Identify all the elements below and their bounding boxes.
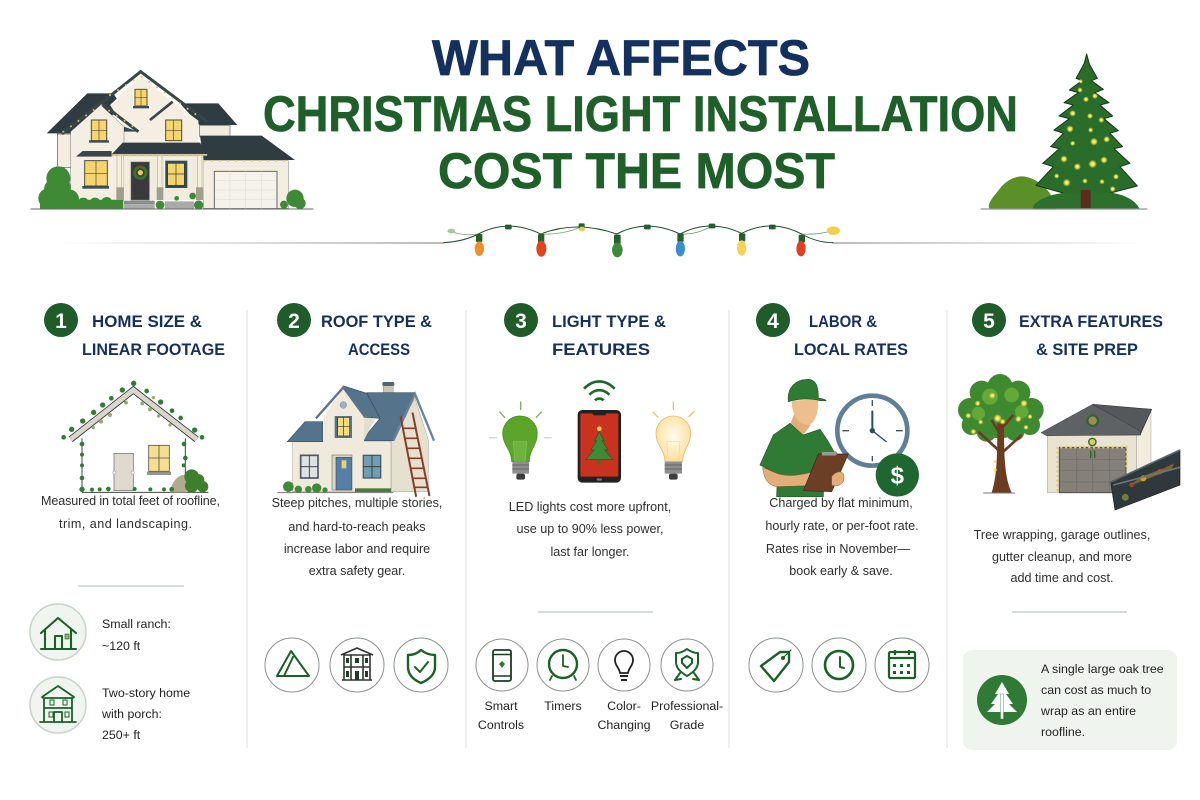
number badge 4 [756, 303, 790, 337]
example: two-story home: Two-story home [102, 686, 190, 700]
heading: ACCESS [348, 340, 410, 359]
heading [321, 312, 432, 359]
heading [1019, 312, 1163, 359]
body text: Tree wrapping, garage outlines, [974, 528, 1150, 542]
title: WHAT AFFECTS [432, 30, 810, 86]
body text: last far longer. [550, 545, 630, 559]
heading: EXTRA FEATURES [1019, 312, 1163, 331]
number badge 5 [972, 303, 1006, 337]
body text [509, 500, 671, 559]
icon: calendar [875, 638, 929, 692]
body text [974, 528, 1150, 585]
number badge 2: 2 [288, 310, 300, 333]
heading: LOCAL RATES [794, 340, 908, 359]
illustration: LED bulb, smart phone, warm bulb [489, 381, 694, 483]
example: two-story home: 250+ ft [102, 728, 141, 742]
divider with string lights [58, 223, 1145, 257]
icon: safety shield [394, 638, 448, 692]
title: COST THE MOST [438, 143, 835, 199]
illustration: lit pine tree [981, 54, 1147, 209]
feature: color-changing [597, 639, 651, 732]
heading: LIGHT TYPE & [552, 312, 666, 331]
illustration: lit tree, garage, gutter [958, 374, 1180, 510]
feature: professional-grade [651, 639, 723, 732]
panel: light type and features [476, 303, 723, 732]
feature: color-changing: Changing [597, 718, 651, 732]
number badge 1: 1 [55, 310, 67, 333]
body text [272, 496, 442, 578]
body text: increase labor and require [284, 542, 430, 556]
body text: and hard-to-reach peaks [288, 520, 426, 534]
panel: home size and linear footage [30, 303, 225, 742]
icon: clock [812, 638, 866, 692]
body text: gutter cleanup, and more [992, 550, 1132, 564]
icon: multi-story building [330, 638, 384, 692]
feature: professional-grade: Professional- [651, 699, 723, 713]
illustration: worker with clipboard and clock: $ [891, 462, 904, 489]
number badge 2 [277, 303, 311, 337]
body text: use up to 90% less power, [516, 522, 664, 536]
panel: extra features and site prep [958, 303, 1180, 750]
heading [82, 312, 225, 359]
callout: oak tree fact: wrap as an entire [1040, 704, 1136, 718]
body text: add time and cost. [1011, 571, 1113, 585]
feature: color-changing: Color- [607, 699, 641, 713]
number badge 5: 5 [983, 310, 995, 333]
title [263, 30, 1018, 199]
body text: book early & save. [789, 564, 893, 578]
icon: house outlined with lights [61, 381, 208, 493]
icon: roof pitch [265, 638, 319, 692]
heading: LINEAR FOOTAGE [82, 340, 225, 359]
example: small ranch [30, 604, 171, 660]
feature: smart controls: Smart [484, 699, 518, 713]
panel: roof type and access [265, 303, 448, 692]
illustration: worker with clipboard and clock [760, 379, 919, 497]
body text [765, 496, 919, 578]
body text: hourly rate, or per-foot rate. [765, 519, 919, 533]
heading: FEATURES [552, 340, 650, 359]
feature: professional-grade: Grade [670, 718, 704, 732]
number badge 1 [44, 303, 78, 337]
callout: oak tree fact: roofline. [1041, 725, 1085, 739]
body text: Steep pitches, multiple stories, [272, 496, 442, 510]
illustration: decorated house [31, 72, 313, 210]
example: small ranch: ~120 ft [102, 639, 141, 653]
body text: trim, and landscaping. [59, 517, 192, 531]
body text: Rates rise in November— [766, 542, 910, 556]
callout: oak tree fact [963, 650, 1177, 750]
number badge 3 [504, 303, 538, 337]
body text: Charged by flat minimum, [769, 496, 913, 510]
example: two-story home [30, 677, 190, 742]
callout: oak tree fact: can cost as much to [1041, 683, 1151, 697]
example: small ranch: Small ranch: [102, 617, 171, 631]
panel: labor and local rates [749, 303, 929, 692]
body text: Measured in total feet of roofline, [41, 494, 220, 508]
feature: timers [537, 639, 589, 713]
body text [41, 494, 220, 531]
heading: ROOF TYPE & [321, 312, 432, 331]
illustration: steep-roof house with ladder [277, 382, 434, 496]
heading [552, 312, 666, 359]
feature: smart controls: Controls [478, 718, 524, 732]
heading: LABOR & [809, 312, 877, 331]
example: two-story home: with porch: [101, 707, 162, 721]
feature: smart controls [476, 639, 528, 732]
heading [794, 312, 908, 359]
heading: & SITE PREP [1036, 340, 1138, 359]
number badge 4: 4 [767, 310, 779, 333]
title: CHRISTMAS LIGHT INSTALLATION [263, 86, 1018, 142]
number badge 3: 3 [515, 310, 527, 333]
body text: extra safety gear. [309, 564, 405, 578]
body text: LED lights cost more upfront, [509, 500, 671, 514]
icon: price tag [749, 638, 803, 692]
callout: oak tree fact: A single large oak tree [1041, 662, 1164, 676]
heading: HOME SIZE & [92, 312, 202, 331]
feature: timers: Timers [544, 699, 582, 713]
